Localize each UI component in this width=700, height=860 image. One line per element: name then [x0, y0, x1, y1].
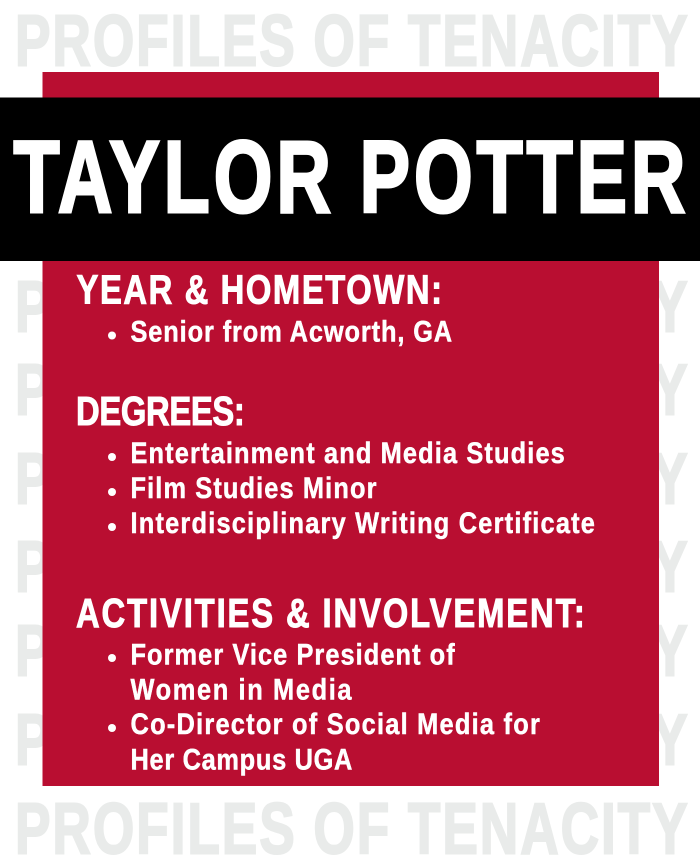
watermark: repeated Profiles of Tenacity text: PROFILES OF TENACITY [15, 351, 688, 430]
list: activities: Co-Director of Social Media for [130, 707, 540, 740]
list: activities: Former Vice President of [130, 638, 455, 671]
watermark: repeated Profiles of Tenacity text: PROFILES OF TENACITY [15, 612, 688, 691]
list: activities [108, 638, 540, 776]
watermark: repeated Profiles of Tenacity text: PROFILES OF TENACITY [15, 2, 688, 81]
watermark: repeated Profiles of Tenacity text: PROFILES OF TENACITY [15, 528, 688, 607]
section: year and hometown [76, 266, 452, 348]
heading: activities and involvement: ACTIVITIES & INVOLVEMENT: [76, 589, 585, 636]
list: degrees [108, 436, 595, 539]
title: name: TAYLOR POTTER [14, 121, 685, 235]
watermark: repeated Profiles of Tenacity text: PROFILES OF TENACITY [15, 440, 688, 519]
list: degrees: Film Studies Minor [130, 471, 377, 504]
list: degrees: Interdisciplinary Writing Certificate [130, 506, 595, 539]
list: degrees: Entertainment and Media Studies [130, 436, 565, 469]
heading: year and hometown: YEAR & HOMETOWN: [76, 266, 442, 312]
title band [0, 98, 700, 261]
section: degrees [76, 387, 595, 539]
list item: hometown: Senior from Acworth, GA [130, 315, 452, 348]
heading: degrees: DEGREES: [76, 387, 245, 434]
watermark: repeated Profiles of Tenacity text: PROFILES OF TENACITY [15, 701, 688, 780]
list: activities: Women in Media [130, 673, 352, 706]
watermark: repeated Profiles of Tenacity text: PROFILES OF TENACITY [15, 268, 688, 347]
panel: red background [42, 72, 659, 786]
list: activities: Her Campus UGA [130, 743, 352, 776]
section: activities and involvement [76, 589, 585, 776]
